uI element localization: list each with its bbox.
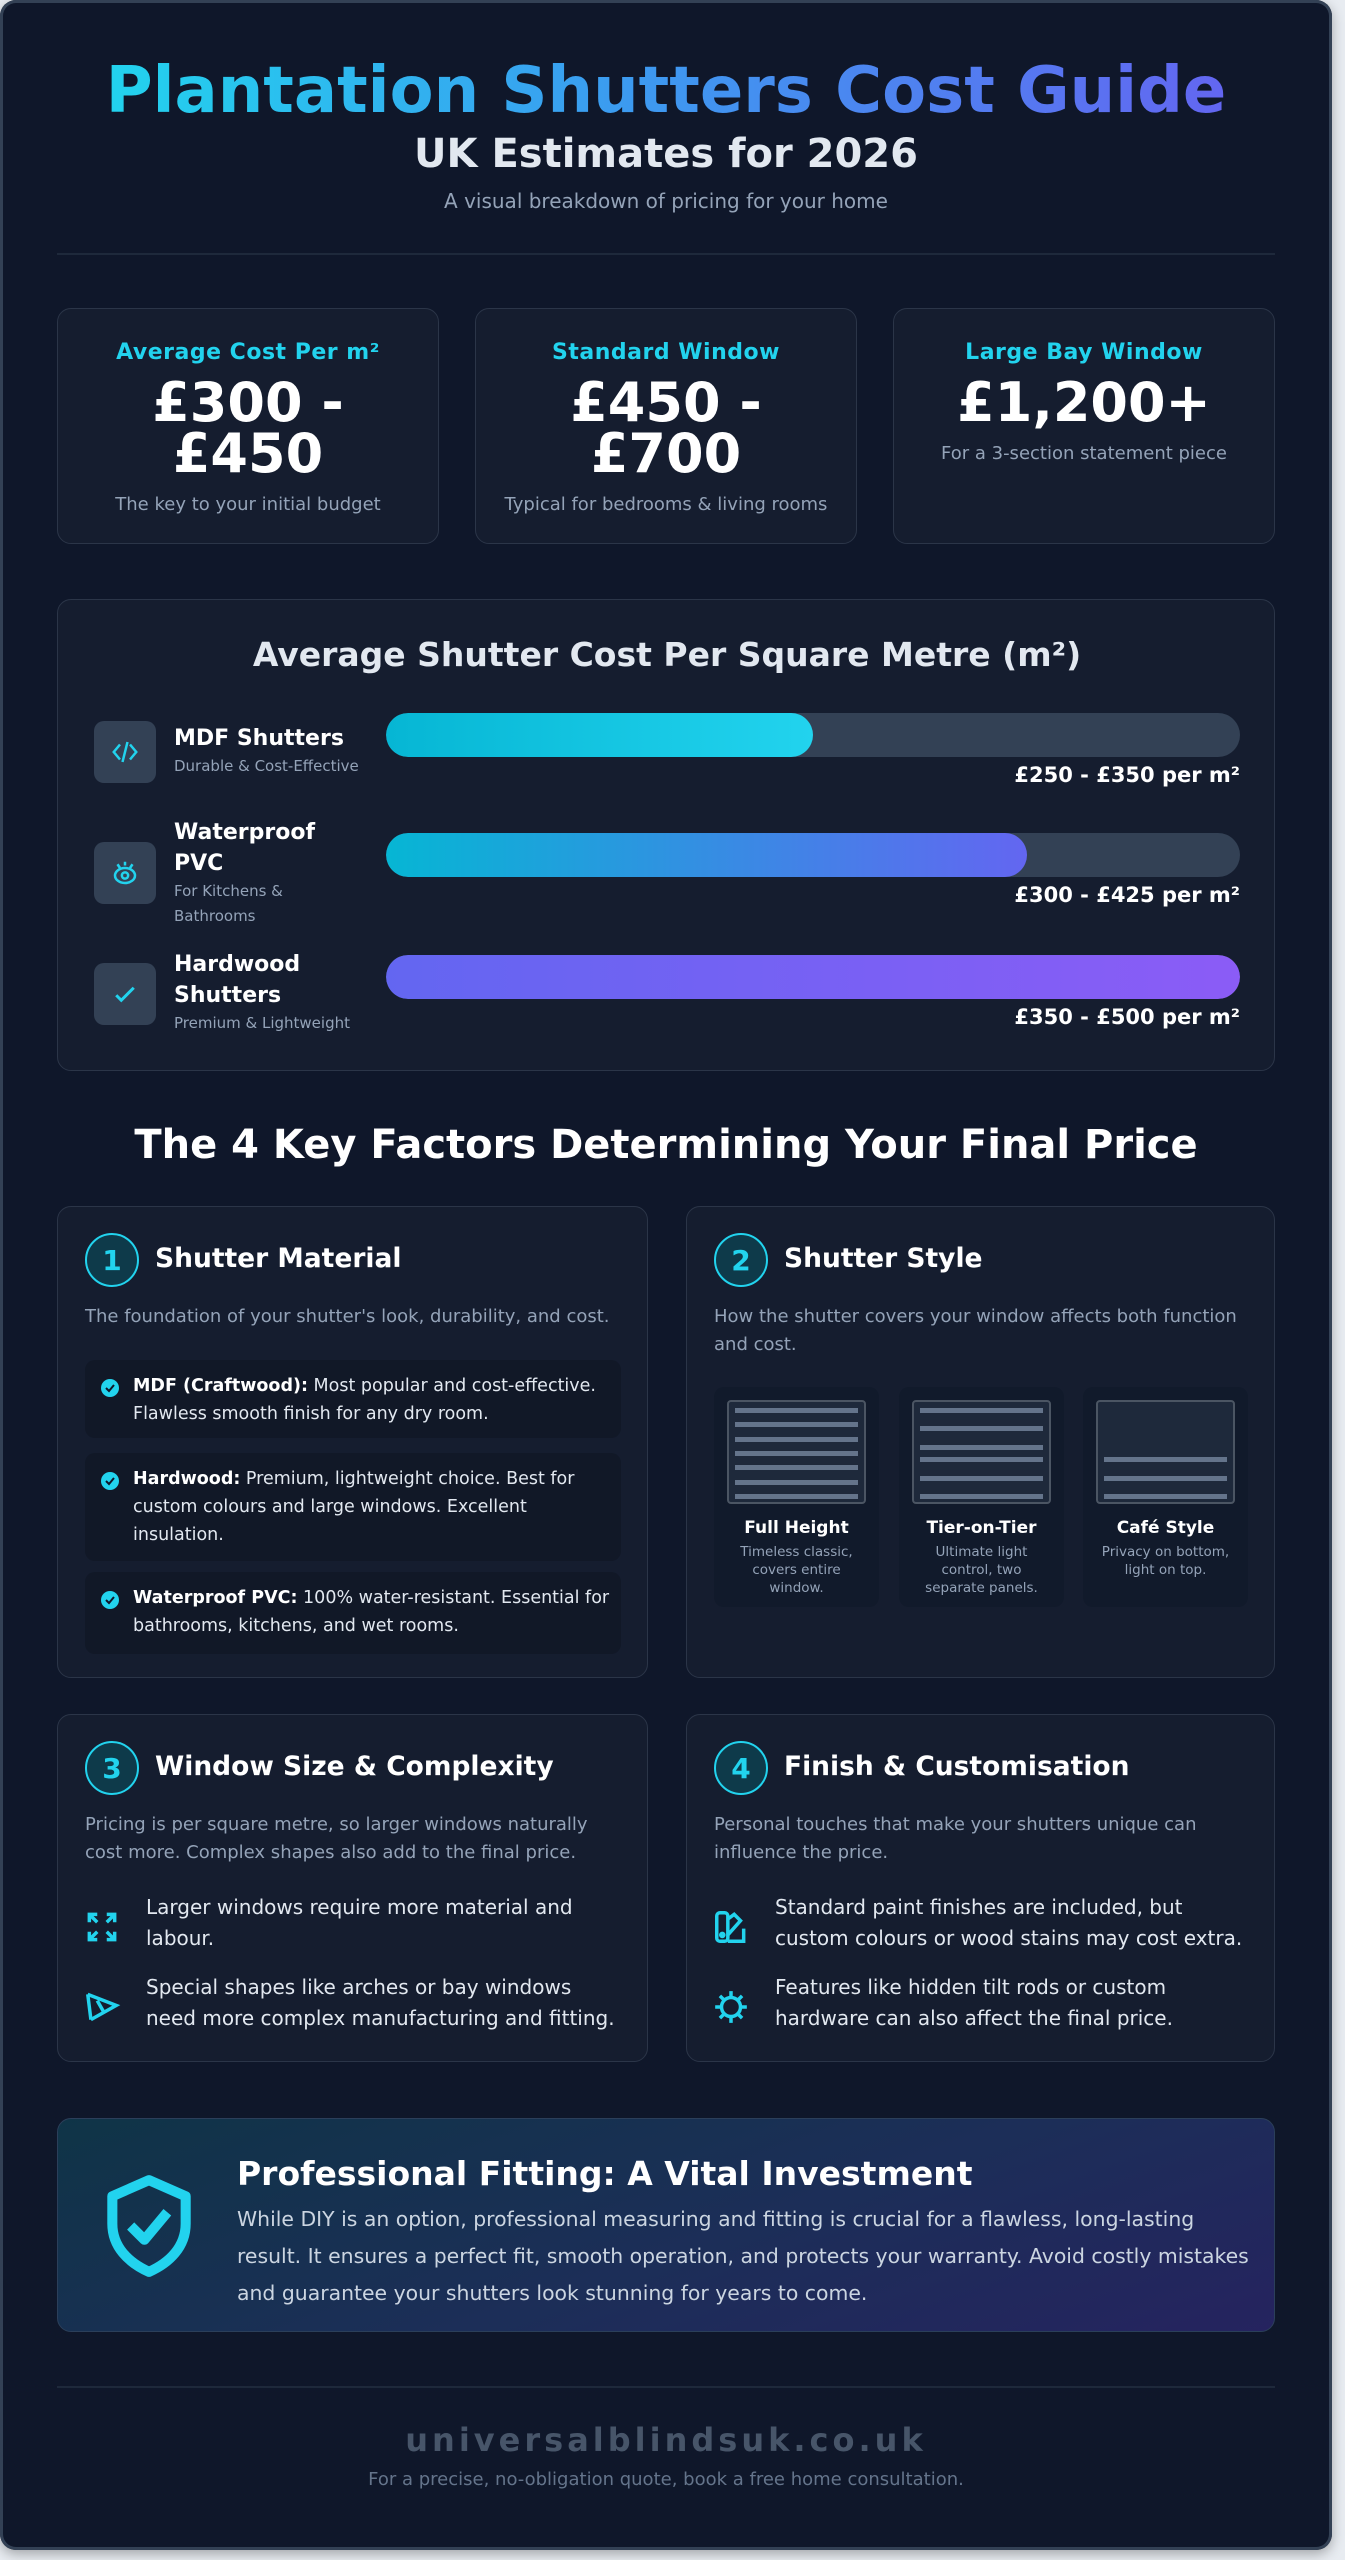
row: Hardwood: Premium & Lightweight [174, 1014, 350, 1032]
style: full height [714, 1387, 879, 1607]
panel: factor 1 shutter material: Shutter Material [155, 1243, 401, 1274]
stat card: standard window: £450 - [570, 371, 762, 434]
row: Hardwood: Hardwood Shutters [174, 952, 300, 1008]
panel: factor 1 shutter material [57, 1206, 648, 1678]
bullet: Hardwood [85, 1453, 621, 1561]
row: MDF: Durable & Cost-Effective [174, 757, 359, 775]
row: Hardwood: £350 - £500 per m² [1014, 1005, 1240, 1029]
chart title: Average Shutter Cost Per Square Metre (m²) [253, 635, 1081, 674]
panel: factor 2 shutter style: Shutter Style [784, 1243, 983, 1274]
panel: cost per square metre chart [57, 599, 1275, 1071]
style: cafe [1083, 1387, 1248, 1607]
row: MDF: MDF Shutters [174, 726, 344, 751]
bullet: Hardwood: Hardwood: Premium, lightweight choice. Best for custom colours and large windows. Excellent insulation. [133, 1469, 574, 1545]
panel: factor 1 shutter material: 1 [102, 1244, 122, 1276]
style: cafe: Privacy on bottom, light on top. [1102, 1544, 1229, 1578]
title: Plantation Shutters Cost Guide [106, 54, 1226, 128]
style: full height: Timeless classic, covers entire window. [740, 1544, 853, 1596]
stat card: average cost: £450 [173, 422, 323, 485]
style: tier on tier [899, 1387, 1064, 1607]
row: PVC: For Kitchens & Bathrooms [174, 882, 283, 925]
callout: professional fitting: While DIY is an option, professional measuring and fitting is crucial for a flawless, long-lasting [237, 2207, 1194, 2231]
style: tier on tier: Ultimate light control, two separate panels. [925, 1544, 1038, 1596]
bullet: MDF [85, 1360, 621, 1438]
panel: factor 3 window size [57, 1714, 648, 2062]
icon: shield [107, 2175, 191, 2277]
panel: factor 2 shutter style [686, 1206, 1275, 1678]
panel: factor 4 finish [686, 1714, 1275, 2062]
style: tier on tier: Tier-on-Tier [926, 1518, 1037, 1538]
style: full height: Full Height [744, 1518, 849, 1538]
tagline: A visual breakdown of pricing for your home [444, 189, 888, 213]
icon: eye [94, 842, 156, 904]
bullet: PVC [85, 1572, 621, 1654]
section heading: The 4 Key Factors Determining Your Final Price [134, 1122, 1198, 1168]
footer url: universalblindsuk.co.uk [405, 2421, 927, 2459]
subtitle: UK Estimates for 2026 [414, 131, 918, 177]
row: PVC: Waterproof PVC [174, 820, 315, 876]
row: PVC [94, 820, 1240, 925]
panel: factor 2 shutter style: 2 [731, 1244, 751, 1276]
stat card: large bay [893, 308, 1275, 544]
stat card: average cost: £300 - [152, 371, 344, 434]
callout: professional fitting: result. It ensures a perfect fit, smooth operation, and protects your warranty. Avoid costly mistakes [237, 2244, 1249, 2268]
row: PVC: £300 - £425 per m² [1014, 883, 1240, 907]
callout: professional fitting: and guarantee your shutters look stunning for years to come. [237, 2281, 867, 2305]
icon: expand [88, 1912, 116, 1942]
row: MDF [94, 713, 1240, 787]
stat card: standard window: £700 [591, 422, 741, 485]
bullet: MDF: MDF (Craftwood): Most popular and cost-effective. Flawless smooth finish for any dry room. [133, 1376, 596, 1424]
stat card: average cost [57, 308, 439, 544]
stat card: standard window [475, 308, 857, 544]
row: MDF: £250 - £350 per m² [1014, 763, 1240, 787]
style: cafe: Café Style [1117, 1518, 1214, 1538]
stat card: average cost: Average Cost Per m² [116, 340, 380, 365]
panel: factor 3 window size: Window Size & Complexity [155, 1751, 554, 1782]
panel: factor 1 shutter material: The foundation of your shutter's look, durability, and cost. [85, 1306, 610, 1327]
stat card: average cost: The key to your initial budget [115, 494, 381, 515]
panel: factor 4 finish: Personal touches that make your shutters unique can influence the price. [714, 1814, 1196, 1863]
row: Hardwood [94, 952, 1240, 1032]
panel: factor 3 window size: Special shapes like arches or bay windows need more complex manufacturing and fitting. [146, 1975, 615, 2030]
icon: paint [715, 1911, 746, 1943]
panel: factor 3 window size: Pricing is per square metre, so larger windows naturally cost more. Complex shapes also add to the final price. [85, 1814, 588, 1863]
icon: gear [715, 1991, 747, 2023]
stat card: large bay: For a 3-section statement piece [941, 443, 1227, 464]
callout: professional fitting: Professional Fitting: A Vital Investment [237, 2154, 972, 2193]
panel: factor 3 window size: Larger windows require more material and labour. [146, 1895, 573, 1950]
panel: factor 2 shutter style: How the shutter covers your window affects both function and cost. [714, 1306, 1237, 1355]
callout: professional fitting [57, 2118, 1275, 2332]
bullet: PVC: Waterproof PVC: 100% water-resistant. Essential for bathrooms, kitchens, and wet rooms. [133, 1588, 609, 1636]
icon: shape [86, 1992, 120, 2022]
stat card: large bay: £1,200+ [957, 371, 1211, 434]
panel: factor 4 finish: 4 [731, 1752, 751, 1784]
panel: factor 4 finish: Finish & Customisation [784, 1751, 1129, 1782]
panel: factor 3 window size: 3 [102, 1752, 122, 1784]
panel: factor 4 finish: Features like hidden tilt rods or custom hardware can also affect the final price. [775, 1975, 1173, 2030]
stat card: standard window: Typical for bedrooms & living rooms [505, 494, 827, 515]
panel: factor 4 finish: Standard paint finishes are included, but custom colours or wood stains may cost extra. [775, 1895, 1242, 1950]
footer note: For a precise, no-obligation quote, book a free home consultation. [368, 2469, 964, 2490]
icon: code [94, 721, 156, 783]
icon: check [94, 963, 156, 1025]
stat card: standard window: Standard Window [552, 340, 780, 365]
stat card: large bay: Large Bay Window [965, 340, 1203, 365]
